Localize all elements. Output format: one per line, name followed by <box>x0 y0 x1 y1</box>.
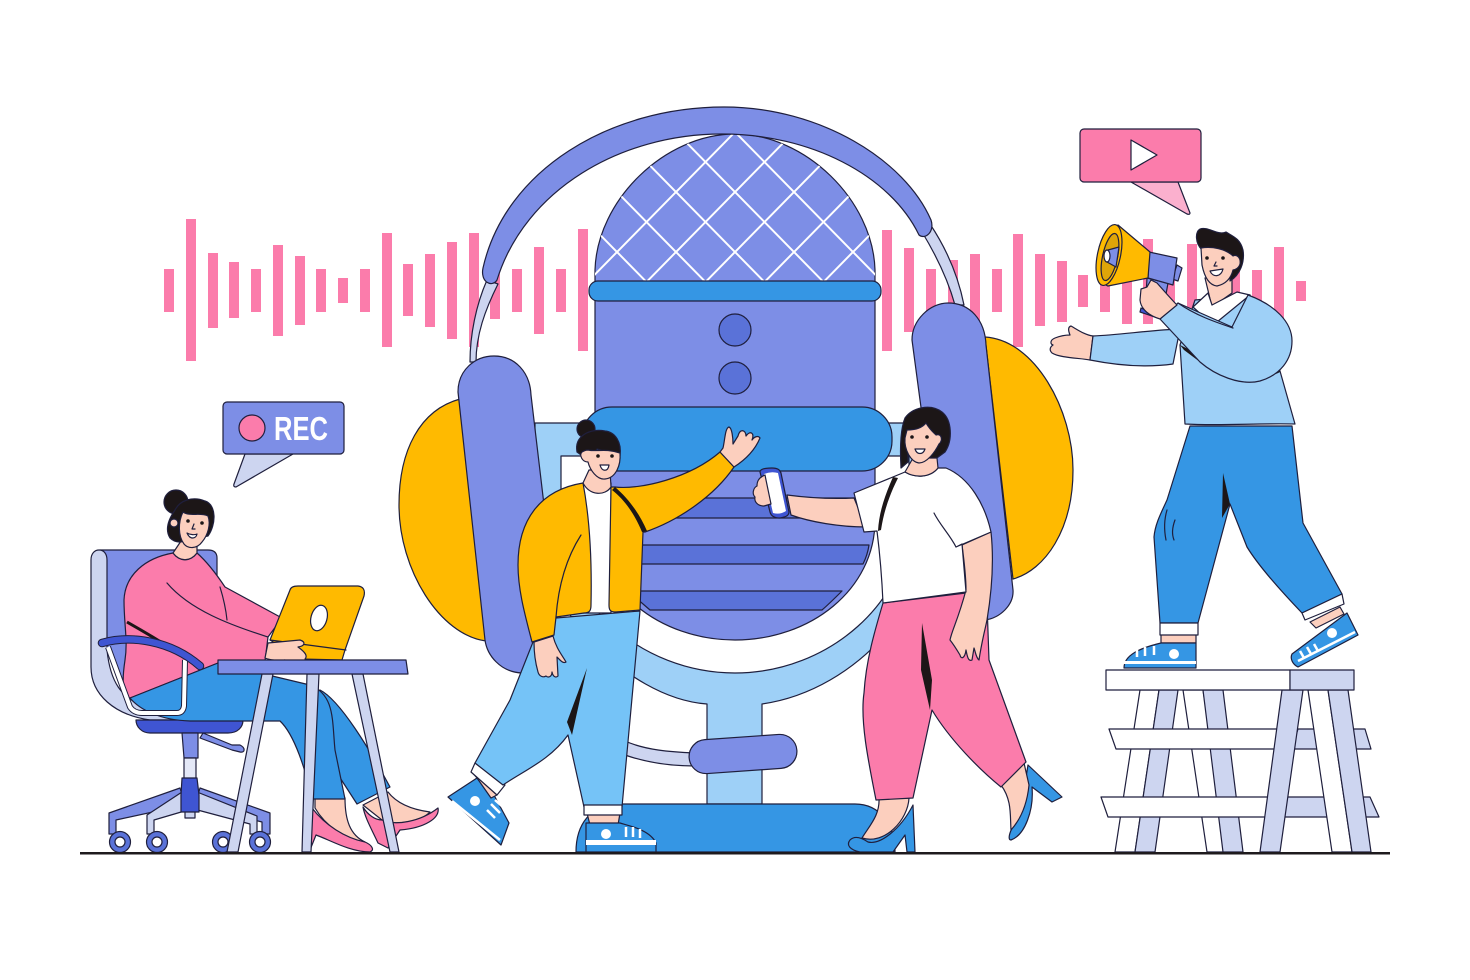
back cuff <box>1302 594 1344 620</box>
phone <box>760 468 789 518</box>
top plank <box>1106 670 1290 690</box>
mic grille <box>595 134 875 285</box>
face <box>581 450 620 479</box>
chair legs front <box>147 792 257 834</box>
strap <box>612 487 647 532</box>
hand on megaphone <box>1140 280 1177 319</box>
right wire <box>922 224 964 305</box>
chair stem <box>182 733 198 758</box>
front cuff <box>584 805 622 815</box>
hair <box>577 430 620 460</box>
face <box>1201 247 1240 286</box>
top plank end <box>1290 670 1354 690</box>
right ear pad <box>985 337 1073 579</box>
near foot <box>315 798 365 842</box>
lowered hand <box>534 636 566 677</box>
seated woman <box>123 490 438 852</box>
desk <box>218 660 408 852</box>
front shoe <box>848 805 915 852</box>
back ankle <box>472 772 497 798</box>
back heel <box>1009 765 1062 840</box>
chair armrest <box>102 640 200 713</box>
play speech bubble <box>1080 129 1201 214</box>
chair lever <box>200 733 244 752</box>
giant microphone <box>535 134 935 852</box>
front ankle <box>1161 634 1196 643</box>
trousers <box>130 663 345 799</box>
left ear cup <box>458 356 560 673</box>
sweater upper arm <box>1160 295 1292 382</box>
jacket right with raised arm <box>609 452 734 612</box>
headphones <box>399 107 1073 673</box>
mic lower bowl with stripes <box>595 460 875 640</box>
raised hand <box>720 427 760 467</box>
neck <box>1205 278 1232 307</box>
hand on laptop <box>265 640 306 666</box>
stand base <box>576 804 895 852</box>
stand knob <box>688 733 798 775</box>
man with megaphone <box>1050 222 1358 668</box>
REC speech bubble: REC <box>274 410 328 447</box>
mic blue band <box>582 407 892 471</box>
office chair <box>91 550 270 852</box>
face <box>905 423 941 463</box>
white rungs <box>1109 729 1293 749</box>
right ear cup <box>912 303 1013 620</box>
mic body <box>595 300 875 420</box>
front ankle <box>587 813 620 825</box>
trousers <box>475 611 640 807</box>
REC speech bubble <box>223 402 344 487</box>
neck <box>173 538 197 560</box>
stand arm <box>625 741 695 766</box>
headband <box>483 107 932 284</box>
far arm <box>950 532 992 660</box>
neck <box>905 458 938 476</box>
trousers <box>863 593 1026 800</box>
far shoe <box>363 807 438 848</box>
chair shell <box>91 550 200 720</box>
strap <box>1180 345 1280 379</box>
mic stand holder <box>535 423 935 804</box>
bag strap <box>878 477 898 531</box>
jacket left <box>518 483 591 642</box>
chair seat <box>136 720 243 733</box>
front shoe <box>586 823 656 852</box>
megaphone <box>1091 222 1182 318</box>
sound waveform <box>164 219 1306 361</box>
back rungs <box>1292 729 1371 749</box>
front shoe <box>1124 643 1196 668</box>
near shoe <box>310 808 372 852</box>
laptop <box>270 586 364 660</box>
waist strap <box>127 622 200 668</box>
sweater torso <box>1180 295 1295 425</box>
neck <box>583 470 611 493</box>
front cuff <box>1160 623 1198 635</box>
back shoe <box>1291 613 1358 667</box>
chair legs back <box>109 788 270 834</box>
hair bun <box>577 420 595 438</box>
sweater <box>123 553 282 698</box>
outstretched arm <box>1090 329 1180 366</box>
ladder legs <box>1115 690 1159 852</box>
woman with phone <box>753 407 1062 852</box>
back foot <box>1001 763 1029 830</box>
hair <box>168 499 214 542</box>
holding arm <box>787 495 866 527</box>
icon: play triangle <box>1131 140 1157 170</box>
collar <box>1193 292 1250 322</box>
mic collar <box>589 281 881 301</box>
face <box>179 512 209 548</box>
ground line <box>80 852 1390 854</box>
hair <box>1196 228 1243 281</box>
front ladder legs <box>1260 690 1303 852</box>
chair back <box>100 550 217 720</box>
back shoe <box>448 778 509 845</box>
chair wheels <box>110 832 270 852</box>
t-shirt <box>583 483 611 613</box>
hair bun <box>164 490 188 514</box>
left wire <box>470 280 498 362</box>
left ear pad <box>399 399 486 641</box>
shirt <box>854 468 991 603</box>
far foot <box>363 792 430 823</box>
back cuff <box>471 763 505 795</box>
standing man with yellow jacket <box>448 420 760 852</box>
outstretched hand <box>1050 326 1093 360</box>
trousers <box>1154 426 1342 623</box>
hair <box>900 407 950 468</box>
hand holding phone <box>753 475 771 506</box>
far trouser leg <box>320 690 390 804</box>
back ankle <box>1310 607 1344 628</box>
front foot <box>862 798 909 839</box>
mic stand inner <box>561 456 909 673</box>
stepladder <box>1101 670 1379 852</box>
